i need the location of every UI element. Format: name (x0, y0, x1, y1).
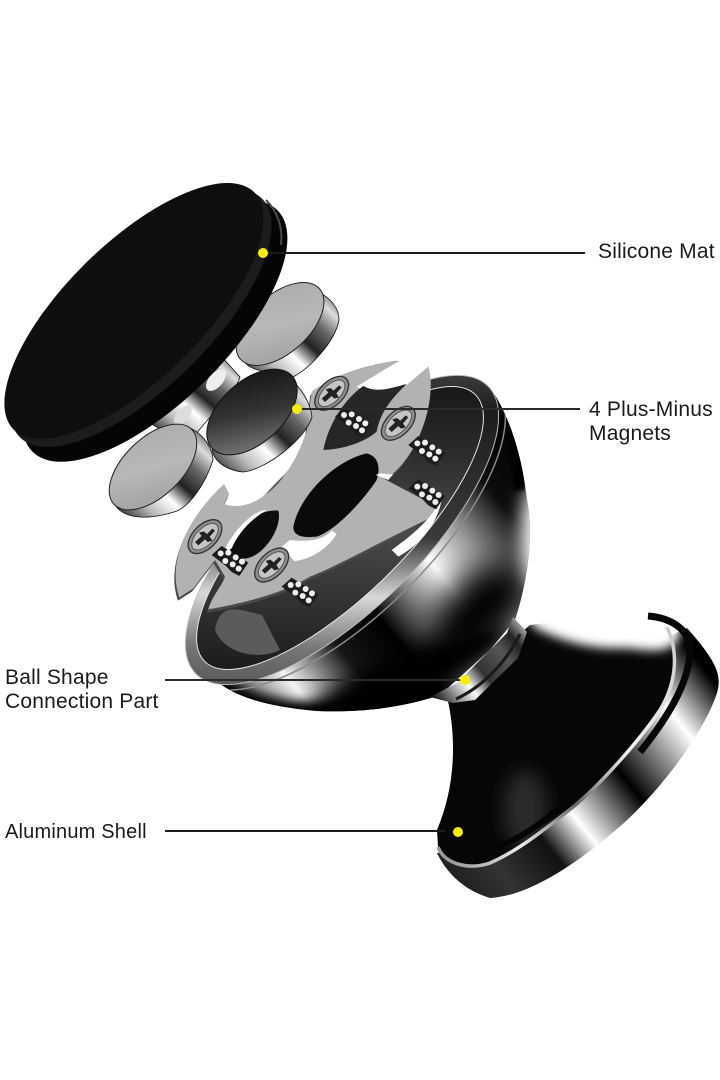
mat face (0, 144, 302, 478)
side (243, 287, 339, 377)
outer black band (640, 616, 690, 752)
plate face (176, 361, 437, 609)
gap between lobes (323, 384, 407, 450)
silicone mat (0, 144, 327, 502)
thread 3 (335, 408, 372, 438)
mat groove (266, 200, 281, 245)
dome outer silver line (230, 410, 505, 690)
marker: magnets (292, 404, 302, 414)
thread 4 (408, 436, 445, 466)
label: ball shape connection: Connection Part (5, 690, 159, 713)
lower right highlight (392, 500, 442, 557)
label: ball shape connection (5, 666, 159, 713)
magnet stem lower (171, 402, 195, 428)
leader line: magnets (300, 408, 580, 410)
cavity (158, 347, 522, 709)
leader line: aluminum shell (165, 830, 445, 832)
label: ball shape connection: Ball Shape (5, 666, 109, 689)
thread 5 (408, 479, 445, 509)
rim edge line (140, 329, 544, 731)
magnet centre (191, 353, 313, 472)
metal plate (174, 358, 445, 613)
neck collar (430, 617, 527, 703)
magnet behind mat (150, 355, 240, 433)
marker: silicone mat (258, 248, 268, 258)
label: silicone mat: Silicone Mat (598, 240, 715, 263)
face (221, 267, 339, 381)
white notch (282, 531, 337, 561)
lower base with aluminum shell (436, 612, 719, 898)
cone body (437, 624, 673, 864)
leader line: ball shape (165, 679, 462, 681)
magnet bottom left (94, 409, 213, 525)
outer rim (140, 329, 544, 731)
label: aluminum shell: Aluminum Shell (5, 821, 147, 843)
thread 2 (282, 578, 318, 608)
left hole highlight (222, 510, 267, 555)
face (94, 409, 212, 525)
magnet stem (202, 366, 230, 394)
centre hole (293, 453, 379, 537)
screw 4 (375, 400, 421, 446)
mat bevel (0, 150, 311, 486)
marker: ball shape (460, 675, 470, 685)
base outer side band (437, 628, 719, 898)
white gap top (357, 358, 427, 391)
upper dome body (221, 394, 530, 712)
screw 2 (249, 542, 295, 588)
side (115, 428, 213, 517)
magnet body (150, 355, 240, 433)
magnet top right (221, 267, 339, 381)
rim with cavity (140, 329, 544, 731)
small notch (376, 473, 393, 480)
mat underside (0, 160, 327, 502)
leader line: silicone mat (268, 252, 585, 254)
marker: aluminum shell (453, 827, 463, 837)
side (212, 372, 312, 472)
left hole (222, 510, 279, 560)
inner black band (447, 735, 630, 853)
dome shading (221, 405, 530, 712)
screw 3 (309, 370, 355, 416)
label: magnets (589, 398, 713, 445)
silver ring (438, 627, 674, 866)
dome shell (200, 378, 530, 711)
label: magnets: 4 Plus-Minus (589, 398, 713, 421)
collar groove (456, 634, 520, 699)
screw 1 (182, 514, 228, 560)
thread 1 (212, 546, 248, 576)
soft white highlight on top of cone (515, 596, 690, 650)
label: magnets: Magnets (589, 422, 671, 445)
cavity shine (215, 609, 280, 655)
plate thickness (174, 364, 435, 613)
face (191, 353, 313, 471)
